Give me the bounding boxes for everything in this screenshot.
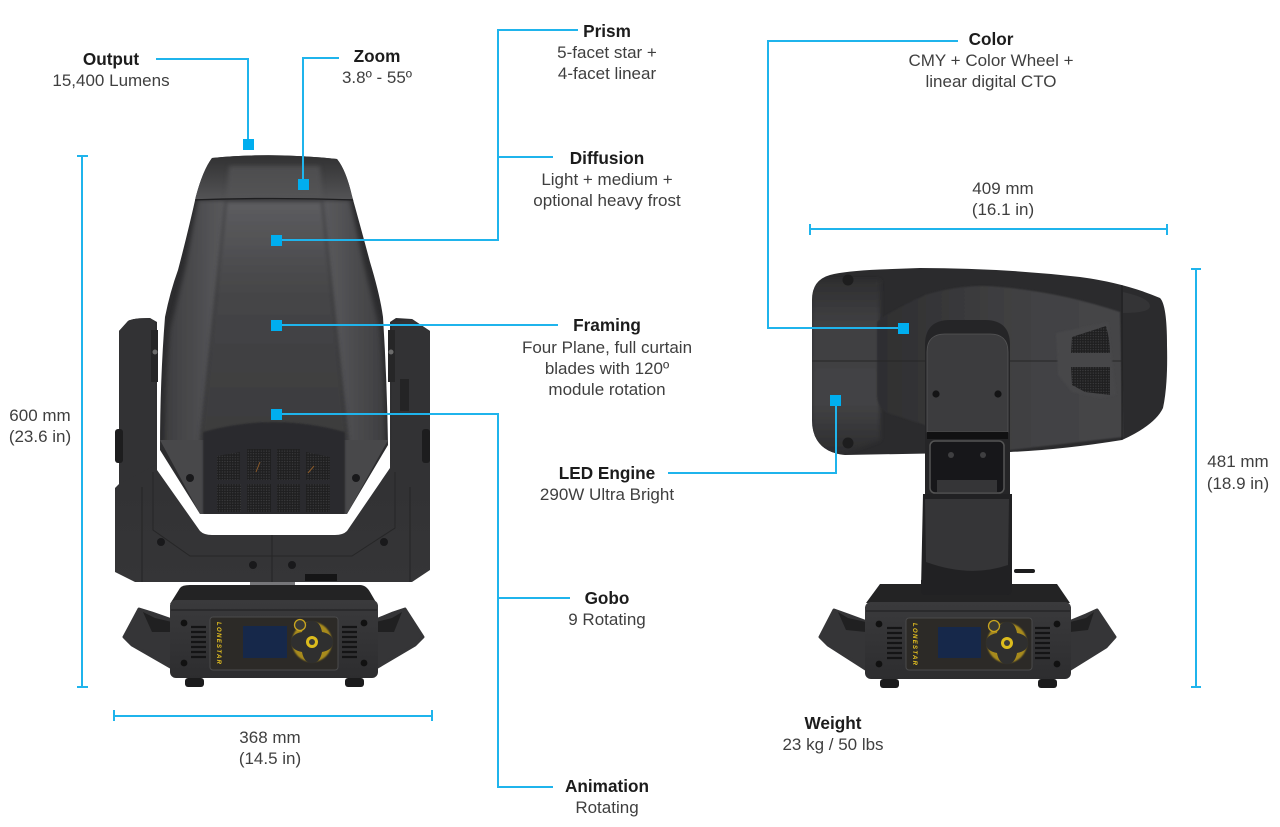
dimension: width front: (14.5 in) — [239, 749, 301, 768]
callout: prism and diffusion: Prism — [583, 21, 631, 41]
dimension: height front: (23.6 in) — [9, 427, 71, 446]
dimension: width side: (16.1 in) — [972, 200, 1034, 219]
callout: gobo and animation: 9 Rotating — [568, 610, 646, 629]
callout: weight: Weight — [805, 713, 862, 733]
callout: weight: 23 kg / 50 lbs — [782, 735, 884, 754]
head shell — [160, 155, 388, 514]
side base — [820, 580, 1115, 688]
callout: prism and diffusion: 5-facet star + — [557, 43, 657, 62]
callout: LED engine — [540, 395, 841, 504]
callout: prism and diffusion: optional heavy frost — [533, 191, 681, 210]
left fixture: front view — [115, 150, 430, 687]
callout: framing — [271, 315, 692, 399]
right fixture: side view — [805, 262, 1175, 688]
callout: color: linear digital CTO — [925, 72, 1057, 91]
dimension: height side: 481 mm — [1207, 452, 1269, 471]
callout: gobo and animation: Gobo — [585, 588, 629, 608]
callout: framing: blades with 120º — [545, 359, 669, 378]
callout: zoom — [298, 46, 412, 190]
callout: LED engine: LED Engine — [559, 463, 655, 483]
side control panel: LONESTAR — [911, 623, 917, 666]
callout: prism and diffusion — [271, 21, 681, 246]
dimension: width side — [810, 179, 1167, 235]
side yoke column — [921, 320, 1035, 595]
callout: framing: Four Plane, full curtain — [522, 338, 692, 357]
base — [124, 582, 423, 687]
control panel — [210, 617, 338, 670]
callout: output: Output — [83, 49, 139, 69]
callout: prism and diffusion: 4-facet linear — [558, 64, 656, 83]
white gap between head and yoke — [157, 444, 390, 534]
callout: zoom: 3.8º - 55º — [342, 68, 412, 87]
callout: prism and diffusion: Diffusion — [570, 148, 644, 168]
dimension: height front — [9, 156, 88, 687]
dimension: height side — [1191, 269, 1269, 687]
callout: prism and diffusion: Light + medium + — [541, 170, 673, 189]
dimension: width side: 409 mm — [972, 179, 1034, 198]
side control panel — [906, 618, 1032, 670]
callout: output — [52, 49, 254, 150]
callout: gobo and animation: Rotating — [575, 798, 639, 817]
callout: LED engine: 290W Ultra Bright — [540, 485, 674, 504]
callout: zoom: Zoom — [354, 46, 400, 66]
callout: weight — [782, 713, 884, 754]
callout: color: CMY + Color Wheel + — [908, 51, 1074, 70]
head vents — [217, 449, 330, 512]
callout: framing: module rotation — [548, 380, 666, 399]
callout: color — [768, 29, 1074, 334]
callout: output: 15,400 Lumens — [52, 71, 170, 90]
control panel: LONESTAR — [215, 622, 221, 665]
callout: framing: Framing — [573, 315, 641, 335]
side head — [812, 268, 1168, 455]
callout: gobo and animation — [271, 409, 649, 817]
dimension: height side: (18.9 in) — [1207, 474, 1269, 493]
dimension: width front — [114, 710, 432, 768]
dimension: width front: 368 mm — [239, 728, 301, 747]
left yoke — [115, 318, 430, 582]
callout: gobo and animation: Animation — [565, 776, 649, 796]
dimension: height front: 600 mm — [9, 406, 71, 425]
callout: color: Color — [969, 29, 1014, 49]
